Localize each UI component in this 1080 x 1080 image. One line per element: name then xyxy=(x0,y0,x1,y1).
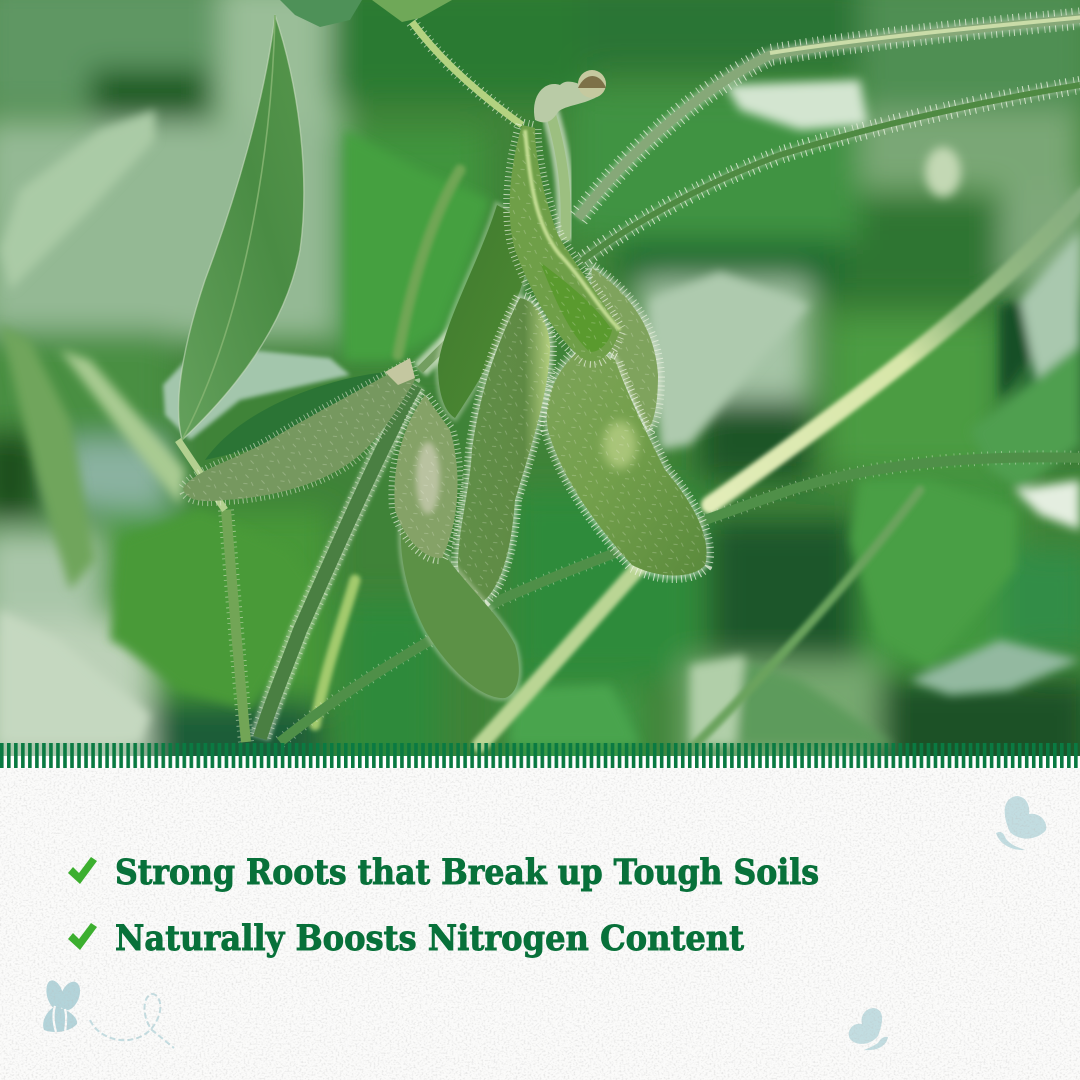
pod: lower xyxy=(394,395,519,698)
icon: butterfly bottom xyxy=(849,1008,888,1050)
pod: upper xyxy=(510,125,620,361)
text: benefit one: Strong Roots that Break up Tough Soils xyxy=(115,852,819,893)
pod tips xyxy=(385,70,606,385)
pod: large front xyxy=(547,345,707,576)
pale main stalk xyxy=(315,170,1080,745)
icon: large leaf xyxy=(163,15,385,460)
pod: left horizontal xyxy=(183,362,415,501)
out-of-focus leaves xyxy=(0,80,1080,745)
icon: check mark xyxy=(68,923,97,950)
stitched stripe border xyxy=(0,743,1080,768)
pod: narrow centre xyxy=(458,298,550,600)
benefit row 1 xyxy=(68,852,819,893)
pod: back right xyxy=(590,268,658,430)
text: benefit two: Naturally Boosts Nitrogen Content xyxy=(115,918,744,959)
photo: soybean plant xyxy=(0,0,1080,790)
icon: check mark xyxy=(68,857,97,884)
hairy stems xyxy=(178,17,1080,742)
blurred foliage background xyxy=(0,0,1080,790)
icon: bee with dashed trail xyxy=(43,978,174,1048)
benefit row 2 xyxy=(68,918,744,959)
icon: butterfly top right xyxy=(996,796,1046,850)
pod: dark rear xyxy=(438,205,525,418)
fabric panel xyxy=(0,756,1080,1080)
pods xyxy=(183,70,707,698)
top small leaves xyxy=(280,0,452,27)
